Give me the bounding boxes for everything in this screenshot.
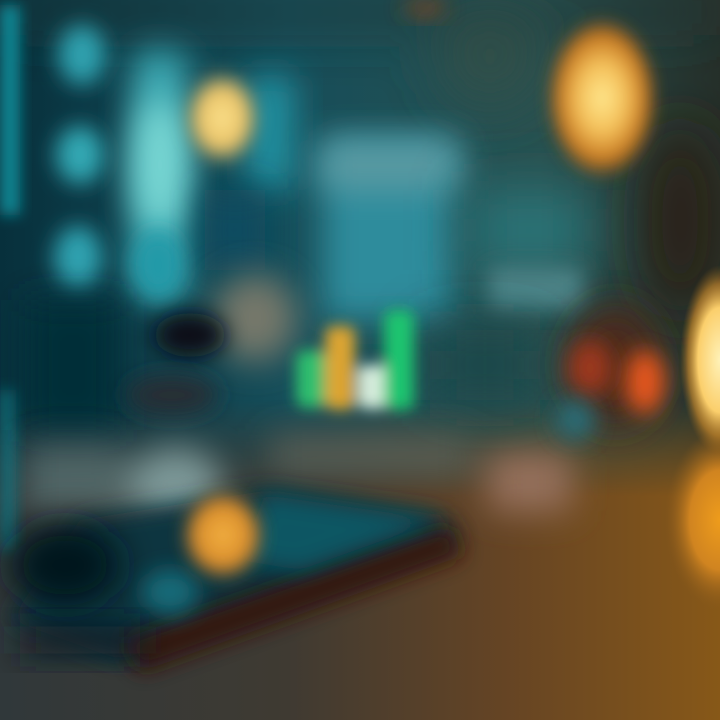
lower wall glow	[25, 435, 572, 523]
dark chart shadows	[25, 274, 297, 430]
right edge lamps	[610, 265, 720, 610]
bright column	[132, 50, 188, 300]
top orange smudge	[403, 0, 447, 16]
icon: upper right lamp	[544, 14, 660, 182]
icon: yellow lamp glow	[180, 66, 264, 170]
red and orange figure	[555, 303, 665, 440]
screen panel: central chart block	[320, 140, 590, 400]
floor and table surface	[0, 400, 720, 720]
left edge strip	[0, 5, 20, 215]
phone / tablet device	[10, 490, 464, 672]
icon: orange coin glow	[177, 485, 269, 585]
teal dots	[54, 25, 106, 290]
top dark band	[0, 0, 720, 320]
screen panel: left teal column group	[0, 5, 294, 550]
second column	[246, 75, 294, 190]
bar chart: green and orange bars	[296, 310, 414, 410]
